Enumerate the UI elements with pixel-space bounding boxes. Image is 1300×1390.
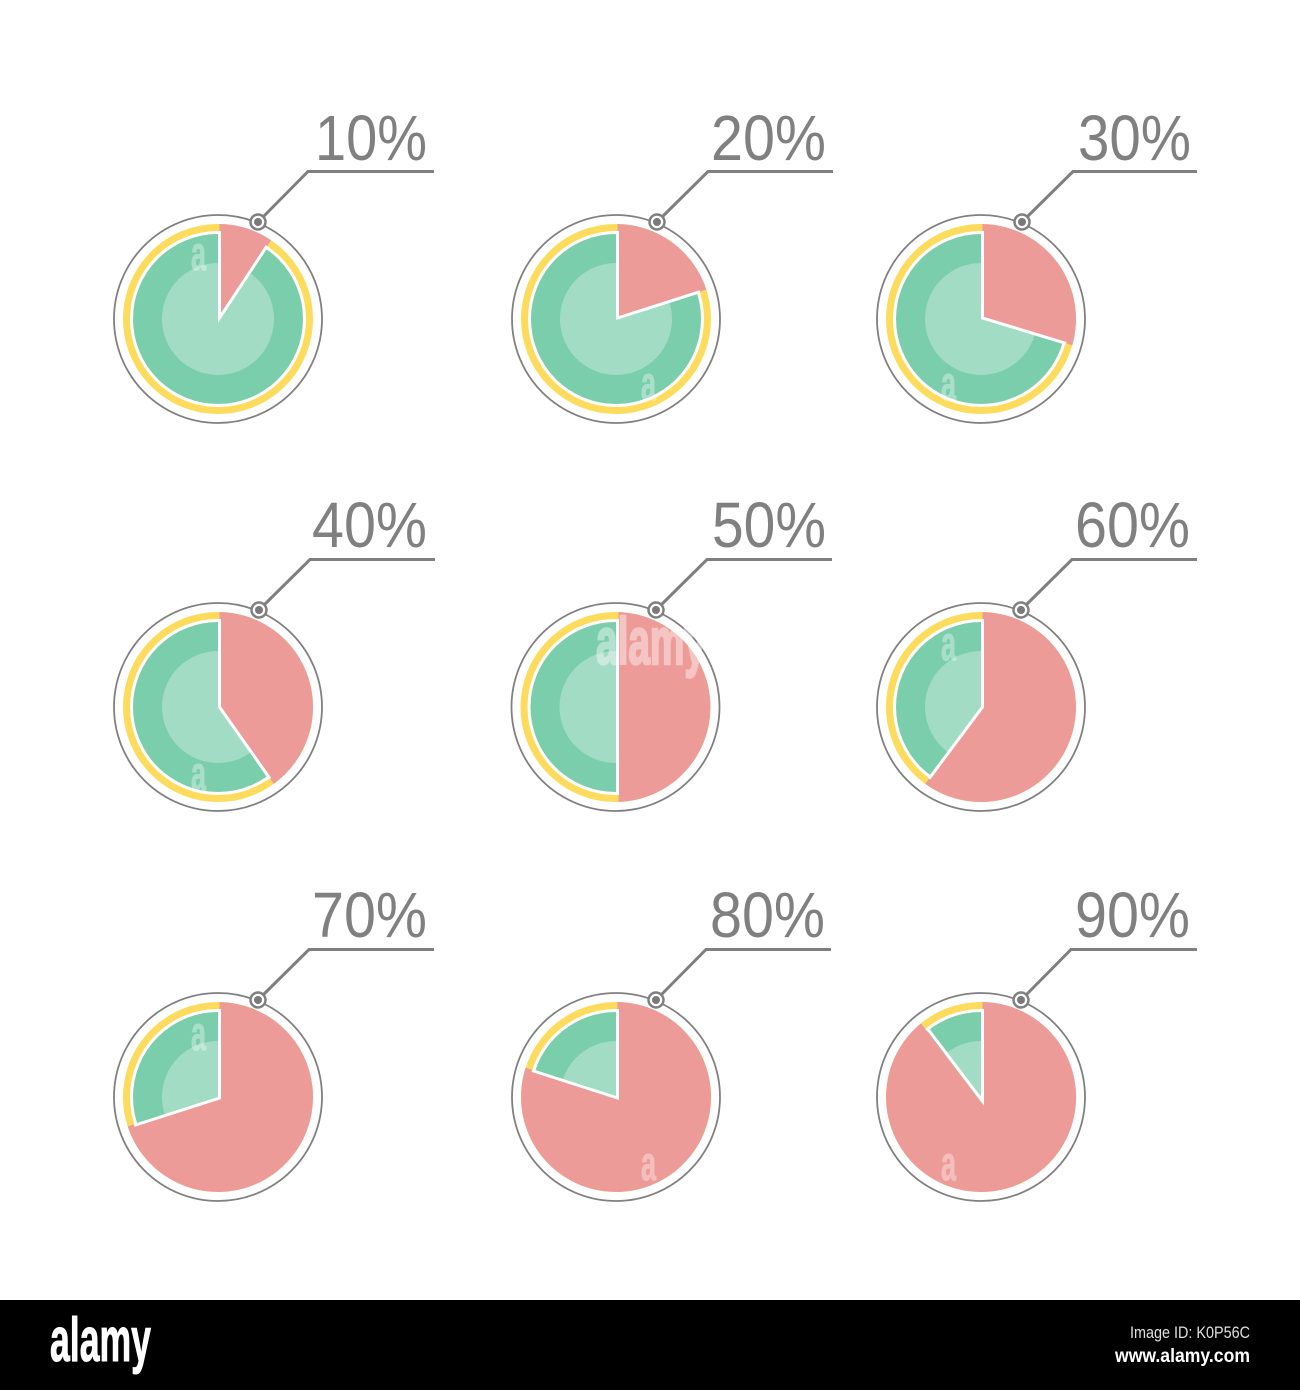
marker: 60%	[1014, 602, 1028, 618]
label: 90%: 90%	[1075, 879, 1190, 951]
pie: 20%	[512, 215, 720, 423]
marker: 40%	[252, 602, 266, 618]
watermark glyph: a	[191, 1008, 206, 1061]
leader line: 70%	[262, 950, 434, 996]
pie: 90%	[877, 993, 1085, 1201]
watermark wordmark: alamy	[596, 604, 706, 678]
watermark glyph: a	[191, 748, 206, 801]
label: 60%: 60%	[1075, 489, 1190, 561]
leader line: 90%	[1025, 950, 1197, 996]
footer bar	[0, 1300, 1300, 1390]
chart: 70%	[114, 879, 434, 1201]
chart: 80%	[512, 879, 831, 1201]
leader line: 10%	[262, 172, 434, 218]
website: www.alamy.com	[1114, 1346, 1250, 1367]
watermark glyph: a	[191, 228, 206, 281]
leader line: 40%	[263, 560, 435, 606]
watermark glyph: a	[641, 358, 656, 411]
marker: 10%	[250, 214, 266, 230]
label: 40%: 40%	[312, 489, 427, 561]
pie: 80%	[512, 993, 720, 1201]
label: 50%: 50%	[712, 489, 826, 561]
marker: 50%	[648, 602, 664, 618]
marker: 30%	[1014, 214, 1030, 230]
chart: 50%	[512, 489, 832, 811]
chart: 40%	[114, 489, 435, 811]
chart: 30%	[877, 102, 1197, 423]
leader line: 20%	[661, 172, 833, 218]
pie: 40%	[114, 603, 322, 811]
leader line: 60%	[1025, 560, 1197, 606]
chart: 10%	[114, 102, 434, 423]
pie: 30%	[877, 215, 1085, 423]
pie: 70%	[114, 993, 322, 1201]
leader line: 80%	[660, 950, 831, 996]
marker: 20%	[650, 214, 664, 230]
label: 80%: 80%	[710, 879, 825, 951]
pie: 60%	[877, 603, 1085, 811]
chart: 60%	[877, 489, 1197, 811]
watermark glyph: a	[941, 618, 956, 671]
footer logo: alamy	[50, 1306, 151, 1375]
leader line: 50%	[660, 560, 832, 606]
label: 10%: 10%	[315, 102, 427, 174]
pie: 50%	[512, 603, 720, 811]
chart: 90%	[877, 879, 1197, 1201]
label: 20%: 20%	[711, 102, 826, 174]
chart: 20%	[512, 102, 833, 423]
marker: 70%	[250, 992, 266, 1008]
watermark glyph: a	[941, 358, 956, 411]
pie: 10%	[114, 215, 322, 423]
marker: 80%	[648, 992, 664, 1008]
label: 30%: 30%	[1078, 102, 1191, 174]
marker: 90%	[1014, 992, 1028, 1008]
watermark glyph: a	[941, 1138, 956, 1191]
image id: Image ID: K0P56C	[1130, 1323, 1250, 1342]
watermark glyph: a	[641, 1138, 656, 1191]
label: 70%: 70%	[312, 879, 427, 951]
leader line: 30%	[1026, 172, 1197, 218]
